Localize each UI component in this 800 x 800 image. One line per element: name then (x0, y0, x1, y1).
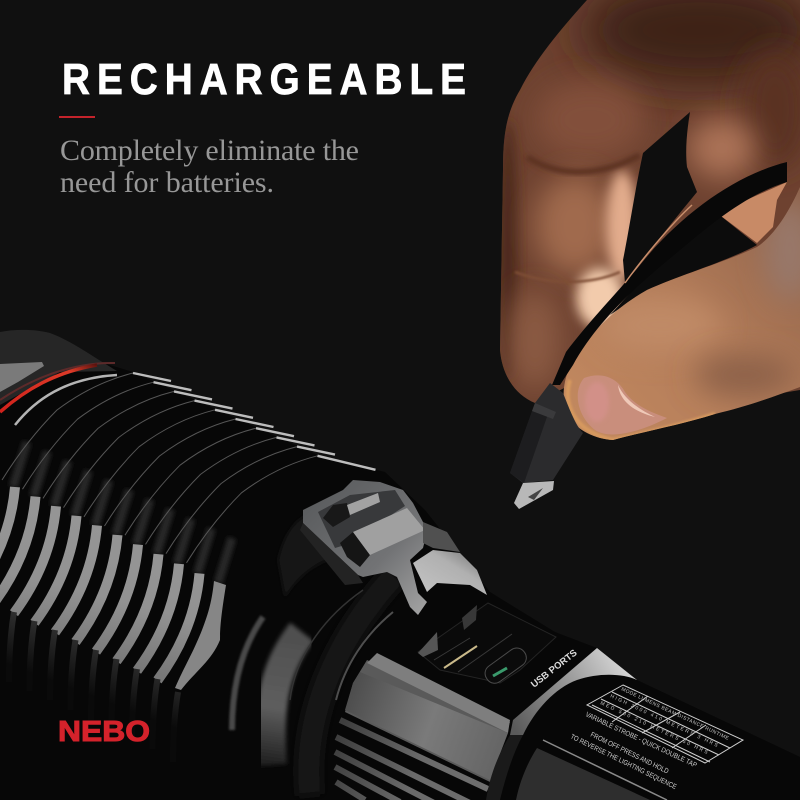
sequence instruction: TO REVERSE THE LIGHTING SEQUENCE (569, 734, 678, 791)
collar dark ring (309, 575, 395, 795)
dark upper palm (580, 0, 800, 85)
collar main band (271, 632, 302, 765)
ring highlight (15, 375, 117, 425)
green contact (493, 668, 507, 676)
port upper metal (462, 605, 477, 630)
table outline (587, 685, 743, 763)
usb connector (510, 383, 583, 509)
skin base (500, 0, 800, 420)
back of hand right (740, 50, 800, 170)
port thin lines (434, 634, 512, 672)
skin shading (498, 0, 800, 390)
port opening outline (418, 603, 556, 683)
stripe lower dark continuation (9, 612, 178, 762)
nebo logo: NEBO (58, 716, 150, 748)
usb cable (552, 162, 787, 385)
collar thin arc (290, 590, 363, 700)
plug dark notch (528, 488, 543, 500)
instruction text (569, 711, 698, 791)
usb port cavity (418, 603, 556, 687)
hold instruction: FROM OFF PRESS AND HOLD (589, 732, 669, 775)
connector ridge (532, 403, 556, 419)
thumb dark knuckle (695, 353, 795, 397)
heat sink lit stripes (0, 487, 200, 680)
red ring dim edge (0, 363, 115, 400)
collar upper shoulder (278, 515, 345, 598)
red ring (0, 365, 97, 412)
grip ribs (335, 720, 488, 800)
upper button (347, 493, 380, 515)
clip recess (318, 490, 405, 548)
metal arch (413, 550, 487, 595)
ring piece glow (717, 182, 787, 243)
collar left band (232, 617, 263, 730)
strobe instruction: VARIABLE STROBE - QUICK DOUBLE TAP (584, 711, 698, 769)
red divider (59, 116, 95, 118)
rib top highlights (133, 373, 376, 470)
lower right body highlight (543, 740, 667, 800)
connector front panel (510, 403, 548, 483)
thumb light (616, 288, 712, 347)
dark lower ring (486, 735, 523, 800)
gap between fingers (623, 112, 697, 283)
spec table (587, 685, 743, 763)
table header: MODE LUMENS BEAM DISTANCE RUNTIME (620, 686, 730, 742)
metal plug (514, 481, 554, 509)
thumb shading (568, 200, 800, 440)
subtitle line one: Completely eliminate the (60, 134, 359, 167)
second crease (515, 272, 620, 282)
knuckle mid tone (535, 80, 645, 160)
table row two: MED 500 210 METERS 50 HRS (599, 700, 709, 756)
upper metal arch (423, 522, 460, 552)
collar inner bright edge (336, 612, 393, 700)
lower button (353, 508, 425, 555)
lower right body surface (516, 748, 650, 800)
crease shadow (527, 155, 640, 172)
clip plate edge shadow (300, 523, 363, 585)
usb-c port (482, 644, 530, 687)
metal switch clip (300, 480, 487, 615)
top rail (367, 653, 510, 733)
clip base plate (303, 480, 433, 615)
usb ports label: USB PORTS (529, 648, 580, 690)
subtitle line two: need for batteries. (60, 166, 274, 199)
finger glow (606, 170, 638, 280)
faint band above stripes (13, 442, 232, 583)
thumbnail (578, 375, 667, 434)
heat sink thin rib edges (2, 373, 318, 563)
gold contact (444, 646, 477, 668)
lower button dark side (340, 532, 370, 567)
gap below cable (610, 213, 757, 315)
table row one: HIGH 2000 410 METERS 3 HRS (609, 693, 719, 749)
thumbnail highlight (618, 385, 655, 417)
grip base (345, 660, 510, 782)
subtitle (60, 134, 359, 199)
hand (498, 0, 800, 509)
finger left shadow (498, 120, 518, 380)
fingertip mid tone (509, 290, 561, 390)
port inner metal (418, 632, 438, 657)
middle finger (688, 118, 756, 178)
upper button dark side (323, 503, 350, 527)
table text (599, 686, 730, 756)
grip top surface (345, 672, 508, 780)
flashlight body silhouette (0, 345, 800, 800)
last wide stripe (175, 581, 226, 690)
thumbnail pink (585, 382, 609, 422)
end cap label text (0, 362, 44, 392)
thumb (564, 187, 800, 440)
cable rim light (625, 205, 692, 283)
title: RECHARGEABLE (62, 54, 466, 104)
silver band (510, 648, 637, 735)
end cap (0, 330, 117, 405)
bright lit knuckle (576, 268, 624, 328)
finger mid tone (535, 175, 615, 275)
thumb orange rim (568, 380, 715, 440)
flashlight (0, 330, 800, 800)
thumb right tone (765, 200, 800, 300)
connector body (510, 383, 583, 483)
